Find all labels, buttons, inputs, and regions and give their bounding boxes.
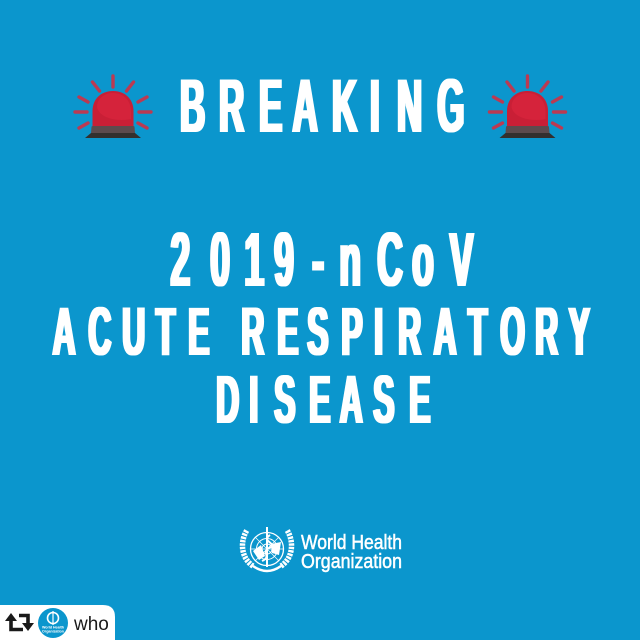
- wordmark: World Health: [301, 532, 402, 554]
- title: disease name: [53, 217, 590, 438]
- title: disease name: 2019-nCoV: [171, 217, 473, 303]
- icon: right siren: [490, 76, 566, 138]
- icon: left siren: [75, 76, 151, 138]
- repost badge: [0, 605, 115, 640]
- avatar: WHO circle logo: [38, 608, 68, 638]
- heading: BREAKING: BREAKING: [180, 63, 464, 149]
- logo: World Health Organization: [242, 527, 402, 573]
- avatar: WHO circle logo: World Health: [42, 626, 64, 630]
- badge background: [0, 605, 115, 640]
- logo: World Health Organization: Organization: [301, 551, 402, 573]
- handle: who: [73, 614, 109, 635]
- emblem: [242, 527, 292, 571]
- title: disease name: ACUTE RESPIRATORY: [53, 293, 590, 370]
- title: disease name: DISEASE: [216, 361, 430, 438]
- avatar: WHO circle logo: Organization: [42, 630, 64, 634]
- icon: repost arrows: [5, 613, 34, 631]
